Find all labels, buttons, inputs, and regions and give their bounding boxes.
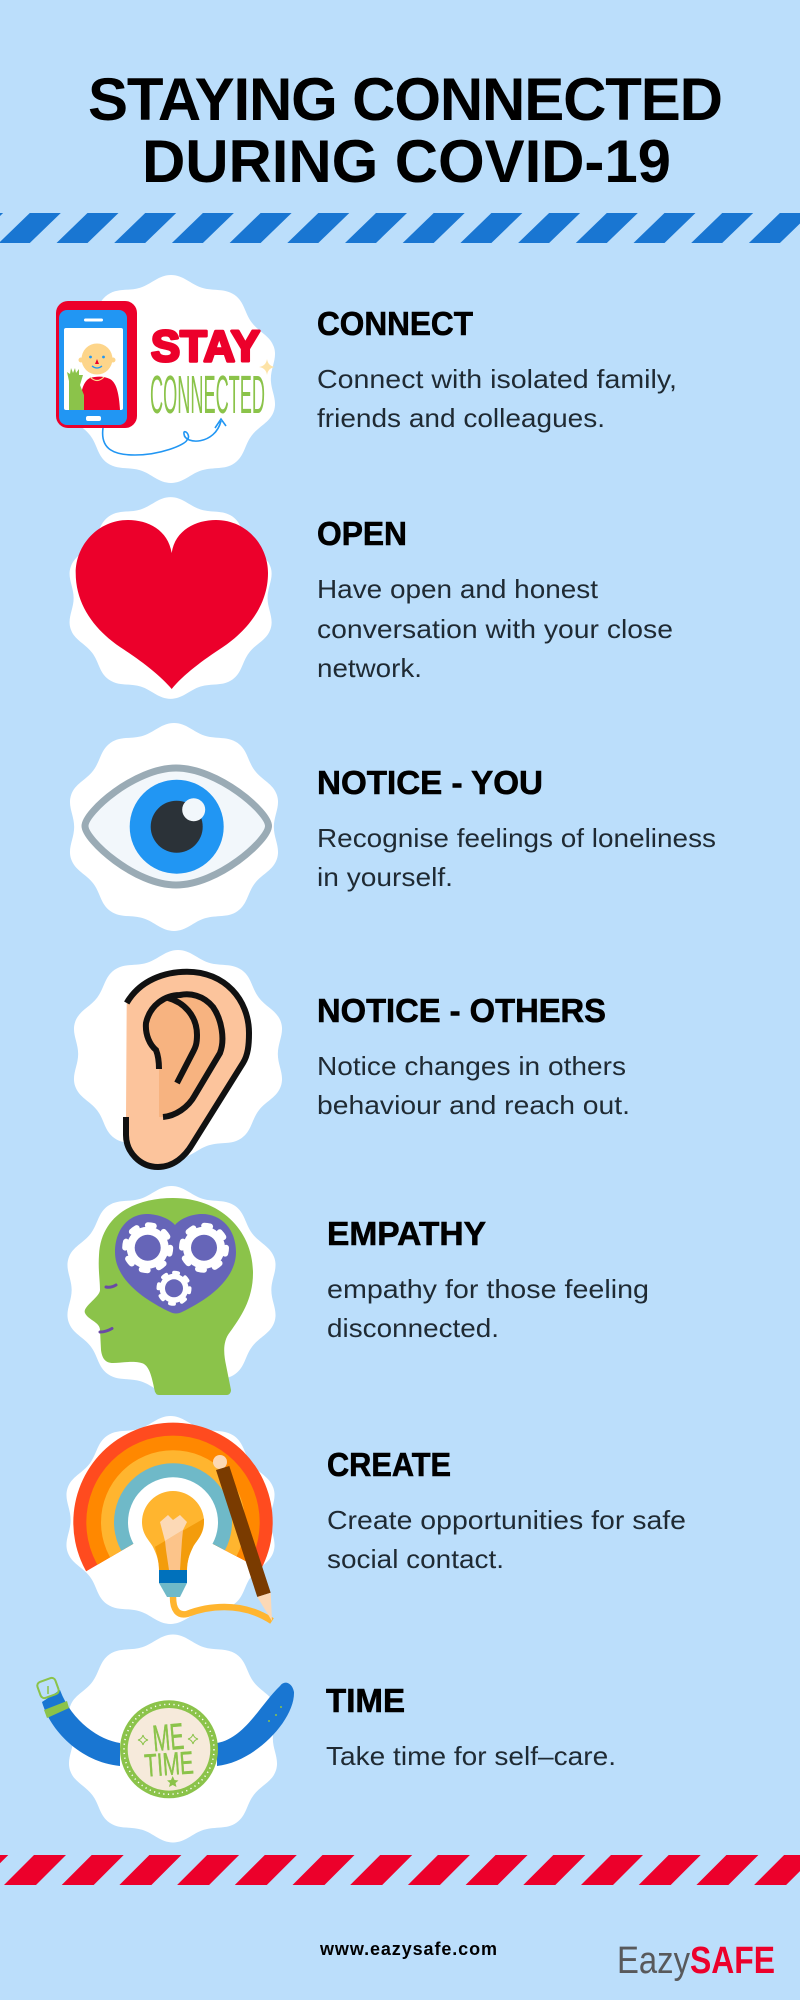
icon: stay connected phone [56,275,275,483]
text: connect body [317,364,677,433]
panel: notice others [74,950,630,1167]
heading: open: OPEN [317,515,407,552]
panel: time [36,1634,616,1842]
text: empathy body: disconnected. [327,1313,499,1343]
blue striped divider [0,213,800,243]
text: open body [317,574,673,683]
heading: notice you: NOTICE - YOU [317,764,543,801]
text: open body: network. [317,653,422,683]
heading: connect: CONNECT [317,305,473,342]
title: DURING COVID-19 [142,128,671,195]
panel: empathy [67,1186,649,1395]
text: notice others body: Notice changes in others [317,1051,626,1081]
text: time body: Take time for self–care. [326,1741,616,1771]
title [88,66,723,195]
text: empathy body [327,1274,649,1343]
website url: www.eazysafe.com [319,1939,497,1959]
panel: open [70,497,673,699]
heading: empathy: EMPATHY [327,1215,486,1252]
text: connect body: friends and colleagues. [317,403,605,433]
text: open body: conversation with your close [317,614,673,644]
icon: eye [70,723,278,931]
text: create body: Create opportunities for safe [327,1505,686,1535]
panel: connect [56,275,677,483]
icon: heart [70,497,272,699]
heading: create: CREATE [327,1446,451,1483]
heading: notice others: NOTICE - OTHERS [317,992,606,1029]
icon: rainbow, light bulb and pencil [66,1416,275,1624]
logo: EazySAFE: SAFE [690,1940,775,1982]
text: notice you body: Recognise feelings of loneliness [317,823,716,853]
text: notice you body: in yourself. [317,862,453,892]
text: create body [327,1505,686,1574]
text: connect body: Connect with isolated family, [317,364,677,394]
text: notice others body [317,1051,630,1120]
icon: head with heart and gears [67,1186,276,1395]
text: create body: social contact. [327,1544,504,1574]
text: notice you body [317,823,716,892]
icon: me time watch: TIME [143,1744,195,1784]
icon: me time watch: ME [151,1716,185,1759]
panel: create [66,1416,686,1624]
icon: ear [74,950,282,1167]
title: STAYING CONNECTED [88,66,723,133]
text: notice others body: behaviour and reach out. [317,1090,630,1120]
icon: me time watch [36,1634,294,1842]
icon: stay connected phone: STAY [151,322,260,371]
red striped divider [0,1855,800,1885]
logo: EazySAFE [617,1940,775,1982]
heading: time: TIME [326,1682,405,1719]
panel: connect: CONNECTED [150,365,265,425]
text: empathy body: empathy for those feeling [327,1274,649,1304]
panel: notice you [70,723,716,931]
logo: EazySAFE: Eazy [617,1940,690,1982]
text: open body: Have open and honest [317,574,599,604]
